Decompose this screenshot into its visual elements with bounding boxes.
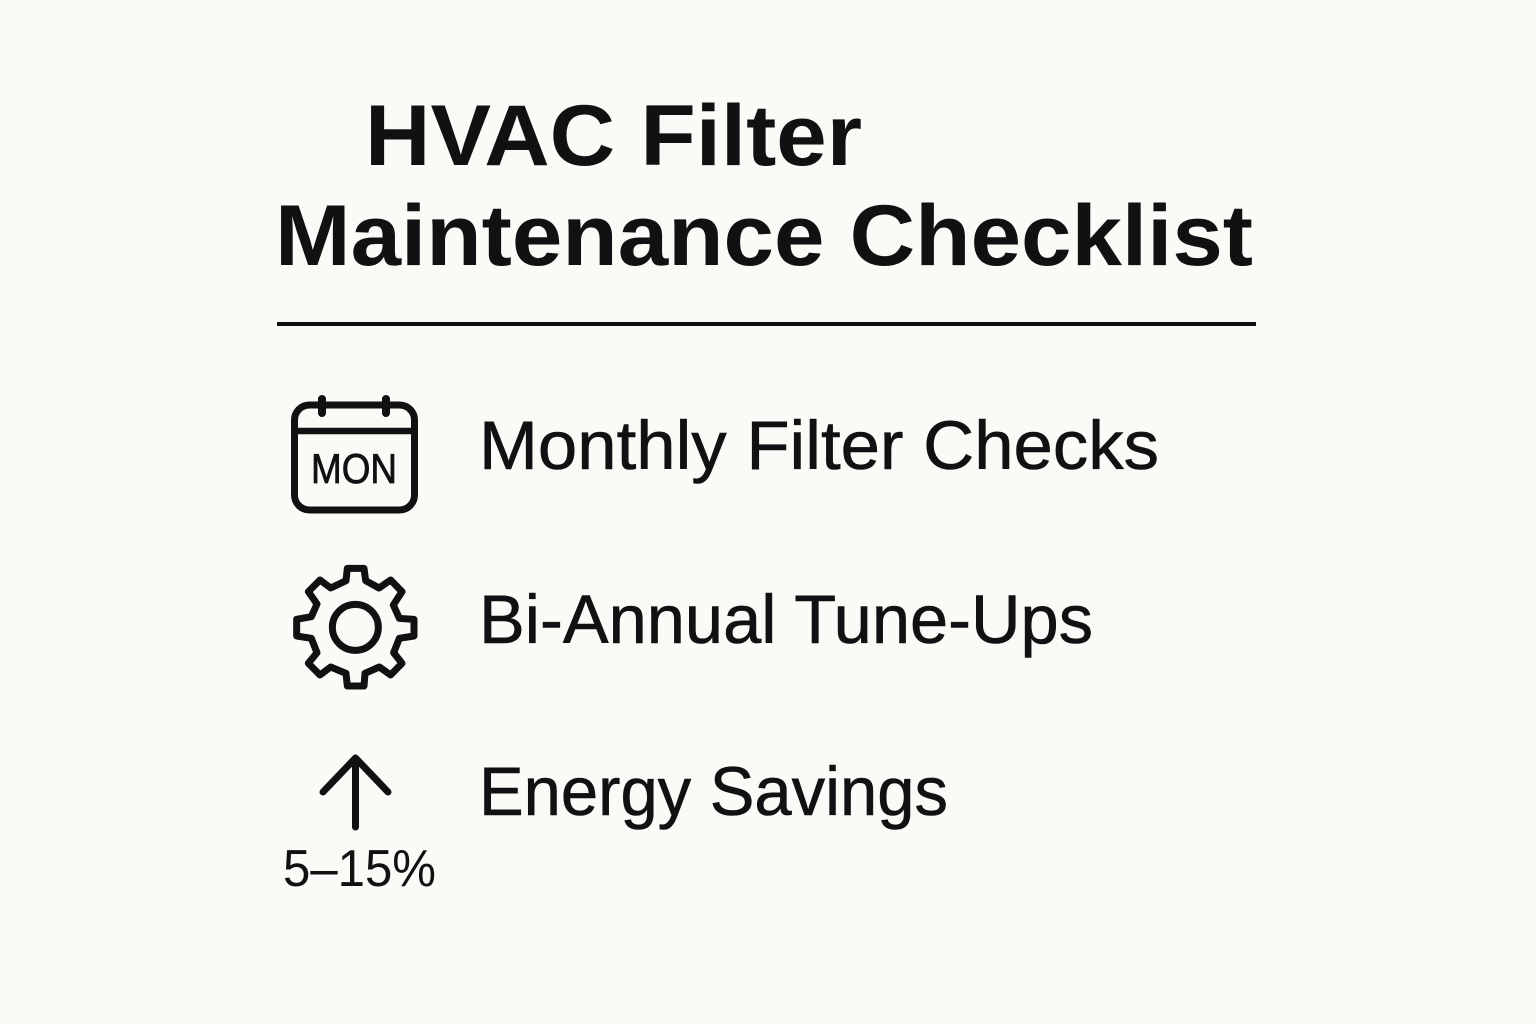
icon: gear bbox=[297, 568, 414, 686]
icon: calendar MON bbox=[294, 399, 414, 510]
item text: Energy Savings: Energy Savings bbox=[479, 753, 948, 830]
title: HVAC Filter bbox=[365, 88, 862, 184]
title bbox=[275, 88, 1253, 284]
icon: calendar MON: MON bbox=[311, 445, 397, 492]
item text: Monthly Filter Checks: Monthly Filter Checks bbox=[479, 407, 1159, 484]
icon: up arrow with 5-15%: 5–15% bbox=[283, 840, 436, 898]
item text: Bi-Annual Tune-Ups: Bi-Annual Tune-Ups bbox=[479, 581, 1093, 658]
icon: up arrow with 5-15% bbox=[283, 758, 436, 898]
title: Maintenance Checklist bbox=[275, 188, 1253, 284]
